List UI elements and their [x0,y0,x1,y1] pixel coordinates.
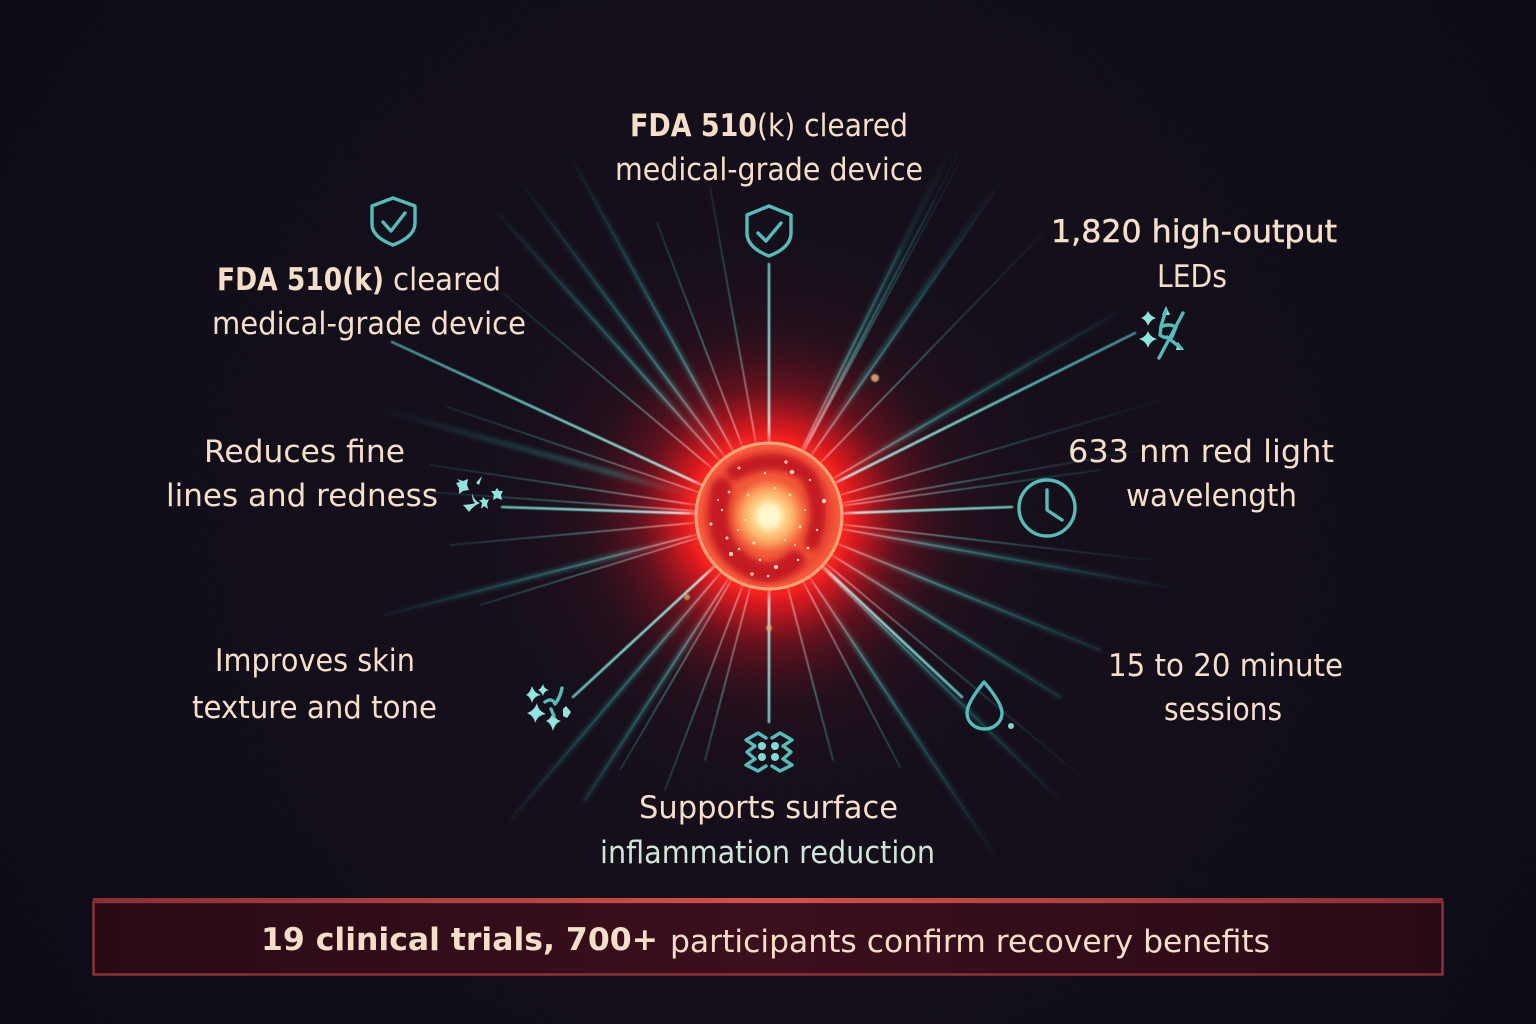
icon: clock [1019,480,1075,536]
icon: sparkles lower-left [526,684,571,731]
icon: sparkles left [456,476,503,512]
left label: fine lines: Reduces fine [204,434,405,470]
left label: fine lines [166,434,438,514]
upper-right label: LEDs: LEDs [1157,259,1227,295]
lower-left label: skin texture: Improves skin [215,643,415,679]
lower-right label: session length: 15 to 20 minute [1108,648,1343,684]
top label: FDA clearance [615,108,923,188]
icon: cells [746,733,792,771]
bottom label: inflammation [600,790,935,871]
bottom label: inflammation: inflammation reduction [600,835,935,871]
right label: wavelength [1068,434,1334,514]
top label: FDA clearance: medical-grade device [615,152,923,188]
upper-left label: FDA clearance: medical-grade device [212,306,526,342]
left label: fine lines: lines and redness [166,478,438,514]
lower-right label: session length [1108,648,1343,728]
banner: clinical trials: 19 clinical trials, 700+ [261,922,658,958]
icon: water drop [967,682,1014,729]
small light flares [684,374,879,631]
upper-left label: FDA clearance: FDA 510(k) [217,262,384,298]
upper-left label: FDA clearance: cleared [393,262,501,298]
banner: clinical trials [93,898,1443,974]
lower-right label: session length: sessions [1164,692,1282,728]
lower-left label: skin texture [192,643,437,726]
central glowing sphere [689,436,849,596]
icon: upper-left shield [372,198,415,245]
right label: wavelength: wavelength [1126,478,1297,514]
bottom label: inflammation: Supports surface [639,790,898,826]
sphere swirl [710,460,826,577]
red glow [509,256,1029,776]
upper-right label: LEDs [1051,214,1337,295]
icon: LED sparkle [1139,306,1184,358]
connector lines [392,264,1135,722]
secondary light rays [345,115,1240,853]
icon: top shield [747,206,791,256]
right label: wavelength: 633 nm red light [1068,434,1334,470]
top label: FDA clearance: (k) cleared [757,108,908,144]
upper-right label: LEDs: 1,820 high-output [1051,214,1337,250]
banner: clinical trials: participants confirm recovery benefits [670,924,1270,960]
lower-left label: skin texture: texture and tone [192,690,437,726]
top label: FDA clearance: FDA 510 [630,108,757,144]
upper-left label: FDA clearance [212,262,526,342]
